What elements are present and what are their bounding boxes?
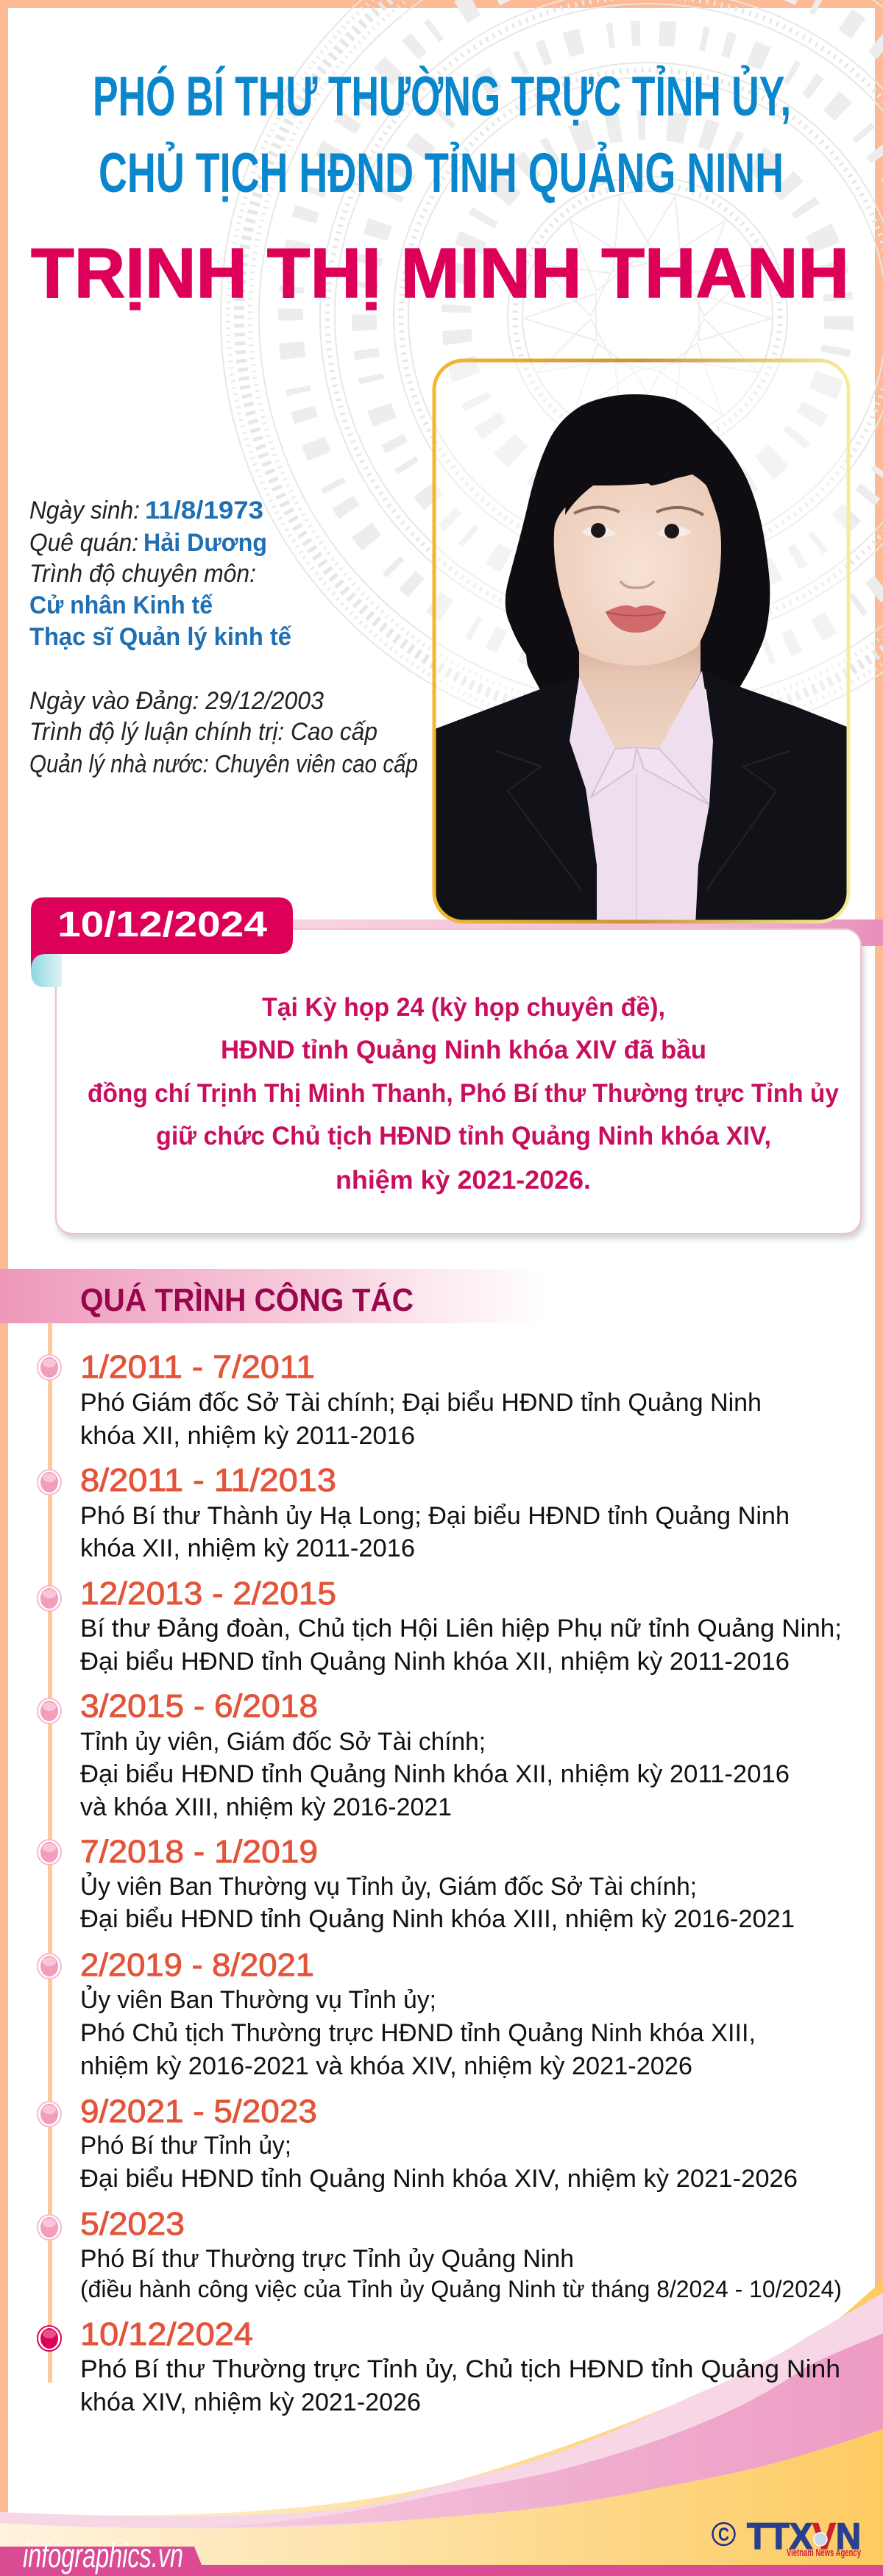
personal information: Ngày vào Đảng: 29/12/2003: [29, 687, 324, 715]
neck: [579, 633, 701, 749]
timeline item 2: [38, 1462, 790, 1562]
date tag: 10/12/2024: [57, 905, 267, 944]
timeline item 7: 9/2021 - 5/2023: [80, 2093, 317, 2130]
timeline item 9: khóa XIV, nhiệm kỳ 2021-2026: [80, 2388, 421, 2416]
bottom wave decoration: [0, 2280, 883, 2576]
announcement text: Tại Kỳ họp 24 (kỳ họp chuyên đề),: [262, 993, 665, 1022]
timeline item 3: [38, 1576, 842, 1676]
timeline item 5: Ủy viên Ban Thường vụ Tỉnh ủy, Giám đốc Sở Tài chính;: [80, 1873, 697, 1901]
pink strip behind date card: [293, 919, 883, 946]
timeline item 1: [38, 1349, 762, 1450]
timeline item 8: Phó Bí thư Thường trực Tỉnh ủy Quảng Ninh: [80, 2245, 574, 2273]
timeline item 7: [38, 2093, 798, 2193]
hair back: [506, 394, 770, 695]
date tag: [31, 897, 293, 987]
timeline item 6: Ủy viên Ban Thường vụ Tỉnh ủy;: [80, 1986, 436, 2014]
personal information: Trình độ lý luận chính trị: Cao cấp: [29, 718, 377, 746]
announcement text: đồng chí Trịnh Thị Minh Thanh, Phó Bí thư Thường trực Tỉnh ủy: [88, 1079, 839, 1108]
yellow wave: [0, 2280, 883, 2576]
timeline item 6: nhiệm kỳ 2016-2021 và khóa XIV, nhiệm kỳ 2021-2026: [80, 2052, 692, 2080]
timeline item 2: 8/2011 - 11/2013: [80, 1462, 336, 1498]
timeline item 7: Phó Bí thư Tỉnh ủy;: [80, 2132, 291, 2160]
timeline item 4: Tỉnh ủy viên, Giám đốc Sở Tài chính;: [80, 1728, 486, 1756]
timeline item 8: (điều hành công việc của Tỉnh ủy Quảng Ninh từ tháng 8/2024 - 10/2024): [80, 2276, 842, 2302]
TTXVN logo: C: [718, 2525, 729, 2545]
timeline item 5: 7/2018 - 1/2019: [80, 1834, 318, 1870]
timeline item 3: 12/2013 - 2/2015: [80, 1576, 336, 1612]
timeline item 5: [38, 1834, 795, 1933]
timeline item 2: Phó Bí thư Thành ủy Hạ Long; Đại biểu HĐND tỉnh Quảng Ninh: [80, 1502, 790, 1530]
TTXVN logo: TTXVN: [747, 2516, 861, 2557]
portrait photo: [431, 360, 851, 927]
personal information: 11/8/1973: [145, 497, 263, 524]
timeline item 7: Đại biểu HĐND tỉnh Quảng Ninh khóa XIV, nhiệm kỳ 2021-2026: [80, 2165, 798, 2193]
eyes: [581, 525, 617, 538]
personal information: Trình độ chuyên môn:: [29, 560, 256, 588]
footer band: [0, 2565, 883, 2576]
source tag: infographics.vn: [23, 2536, 183, 2575]
timeline item 4: [38, 1688, 790, 1821]
shirt: [570, 671, 713, 927]
announcement text: giữ chức Chủ tịch HĐND tỉnh Quảng Ninh khóa XIV,: [156, 1122, 771, 1150]
bronze drum background pattern: [221, 0, 883, 743]
lapels: [496, 751, 581, 890]
heading: name: TRỊNH THỊ MINH THANH: [31, 234, 849, 313]
brows: [574, 507, 620, 513]
collar: [591, 747, 709, 805]
timeline item 3: Đại biểu HĐND tỉnh Quảng Ninh khóa XII, nhiệm kỳ 2011-2016: [80, 1648, 790, 1676]
timeline item 8: 5/2023: [80, 2206, 185, 2242]
personal information: Hải Dương: [143, 529, 267, 557]
timeline item 9: [38, 2316, 840, 2416]
timeline item 4: Đại biểu HĐND tỉnh Quảng Ninh khóa XII, nhiệm kỳ 2011-2016: [80, 1760, 790, 1788]
announcement card: [56, 929, 861, 1234]
announcement text: HĐND tỉnh Quảng Ninh khóa XIV đã bầu: [221, 1036, 706, 1064]
timeline item 4: và khóa XIII, nhiệm kỳ 2016-2021: [80, 1793, 452, 1821]
timeline item 2: khóa XII, nhiệm kỳ 2011-2016: [80, 1534, 415, 1562]
timeline item 1: 1/2011 - 7/2011: [80, 1349, 315, 1385]
timeline item 4: 3/2015 - 6/2018: [80, 1688, 318, 1724]
timeline item 9: 10/12/2024: [80, 2316, 253, 2352]
personal information: Quê quán:: [29, 529, 138, 557]
lips: [606, 605, 666, 633]
timeline item 9: Phó Bí thư Thường trực Tỉnh ủy, Chủ tịch HĐND tỉnh Quảng Ninh: [80, 2355, 840, 2383]
blazer: [431, 677, 597, 927]
personal information: [29, 497, 418, 778]
timeline item 8: [38, 2206, 842, 2302]
timeline: [38, 1349, 842, 2416]
timeline item 5: Đại biểu HĐND tỉnh Quảng Ninh khóa XIII, nhiệm kỳ 2016-2021: [80, 1905, 795, 1933]
announcement text: [88, 993, 839, 1195]
timeline item 1: khóa XII, nhiệm kỳ 2011-2016: [80, 1422, 415, 1450]
heading: position: [93, 65, 791, 204]
dark pink wave: [199, 2333, 883, 2528]
personal information: Ngày sinh:: [29, 497, 140, 524]
section heading: work history: [0, 1269, 545, 1323]
personal information: Cử nhân Kinh tế: [29, 591, 213, 619]
bangs: [565, 478, 707, 515]
nose: [620, 581, 654, 588]
section heading: work history: QUÁ TRÌNH CÔNG TÁC: [80, 1281, 414, 1318]
personal information: Quản lý nhà nước: Chuyên viên cao cấp: [29, 750, 418, 778]
light pink wave: [0, 2293, 883, 2528]
timeline item 6: Phó Chủ tịch Thường trực HĐND tỉnh Quảng Ninh khóa XIII,: [80, 2019, 756, 2047]
timeline item 6: 2/2019 - 8/2021: [80, 1947, 314, 1983]
timeline line: [48, 1323, 52, 2383]
timeline item 3: Bí thư Đảng đoàn, Chủ tịch Hội Liên hiệp Phụ nữ tỉnh Quảng Ninh;: [80, 1615, 842, 1643]
timeline item 6: [38, 1947, 756, 2080]
timeline item 1: Phó Giám đốc Sở Tài chính; Đại biểu HĐND tỉnh Quảng Ninh: [80, 1389, 762, 1417]
face: [554, 474, 721, 666]
personal information: Thạc sĩ Quản lý kinh tế: [29, 623, 291, 651]
announcement text: nhiệm kỳ 2021-2026.: [336, 1166, 591, 1195]
